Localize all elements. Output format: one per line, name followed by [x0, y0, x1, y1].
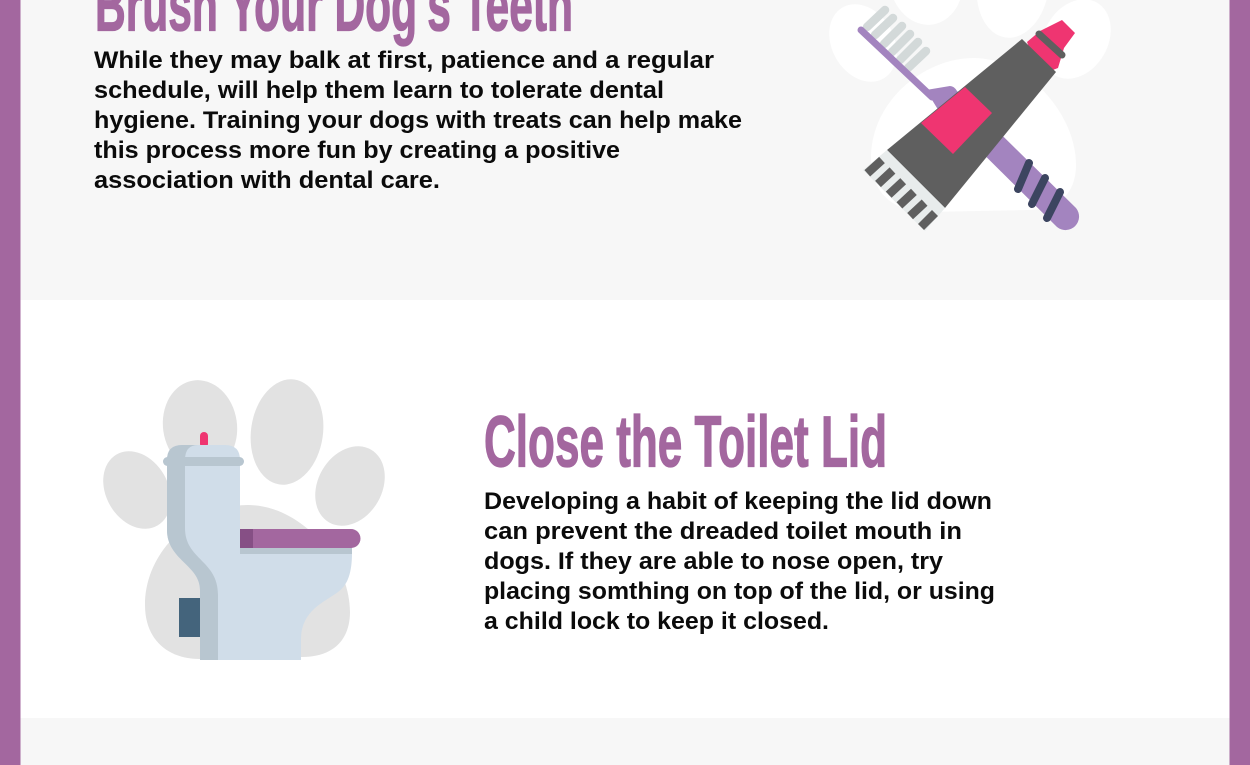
icon: grey paw print — [90, 375, 399, 659]
text block: brushing advice: this process more fun by creating a positive — [94, 137, 620, 164]
icon: toothbrush and toothpaste on white paw — [816, 0, 1125, 231]
text block: toilet lid advice: dogs. If they are able to nose open, try — [484, 548, 943, 575]
panel: brush teeth background — [20, 0, 1230, 300]
text block: toilet lid advice: can prevent the dreaded toilet mouth in — [484, 518, 962, 545]
text block: brushing advice: association with dental care. — [94, 167, 440, 194]
text block: brushing advice: hygiene. Training your dogs with treats can help make — [94, 107, 742, 134]
heading: Close the Toilet Lid: Close the Toilet Lid — [484, 402, 887, 482]
text block: brushing advice — [94, 47, 742, 194]
icon: white paw print — [816, 0, 1125, 212]
panel: next section background — [20, 718, 1230, 765]
icon: toothbrush — [861, 10, 1079, 230]
icon: toilet — [163, 432, 360, 660]
left purple border — [0, 0, 20, 765]
text block: toilet lid advice: Developing a habit of keeping the lid down — [484, 488, 992, 515]
icon: toothpaste tube — [863, 20, 1075, 231]
panel: toilet lid background — [20, 300, 1230, 718]
text block: toilet lid advice: a child lock to keep it closed. — [484, 608, 829, 635]
text block: brushing advice: While they may balk at first, patience and a regular — [94, 47, 714, 74]
icon: toilet on grey paw — [90, 375, 399, 660]
text block: toilet lid advice — [484, 488, 995, 635]
right purple border — [1230, 0, 1250, 765]
text block: brushing advice: schedule, will help them learn to tolerate dental — [94, 77, 664, 104]
text block: toilet lid advice: placing somthing on top of the lid, or using — [484, 578, 995, 605]
